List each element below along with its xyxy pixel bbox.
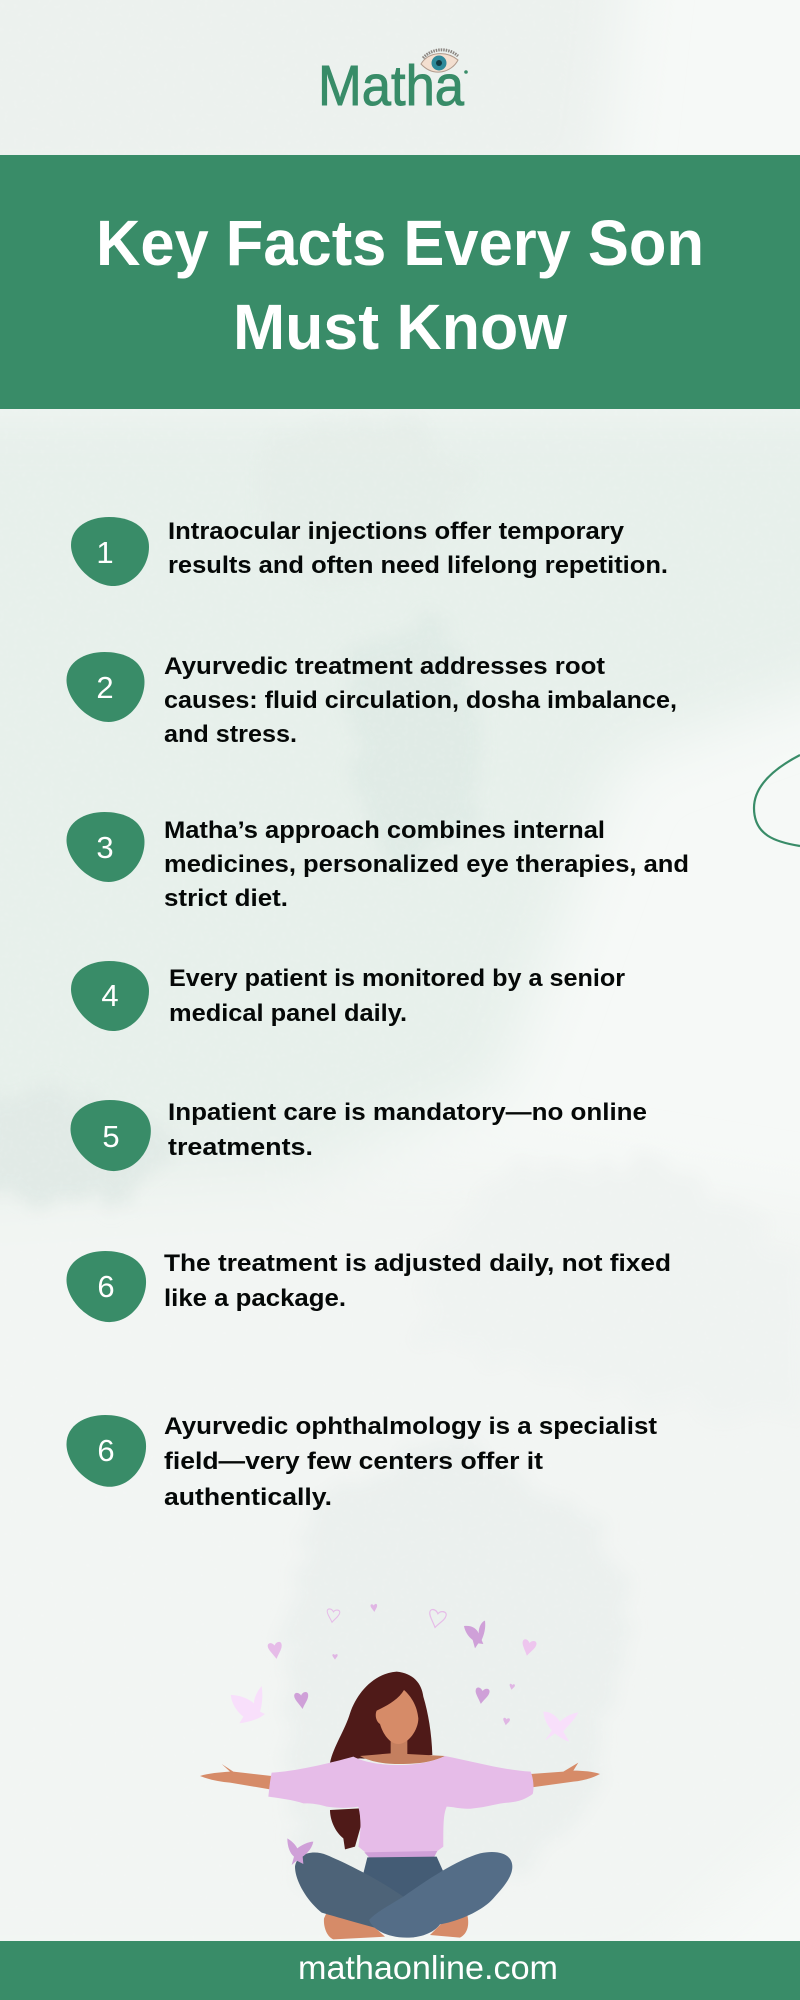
fact 1 (71, 517, 668, 586)
butterfly on knee (287, 1838, 313, 1865)
fact 1 text: results and often need lifelong repetition. (168, 552, 668, 579)
decorative outline curve (754, 755, 800, 846)
badge 2: 2 (96, 670, 114, 705)
footer band (0, 1941, 800, 2000)
fact 6 text (164, 1250, 671, 1312)
face (376, 1690, 418, 1744)
logo registered mark (464, 70, 468, 74)
fact 4 text (169, 965, 625, 1027)
fact 3 (66, 812, 689, 912)
fact 5 text (168, 1099, 647, 1161)
badge 5: 5 (102, 1119, 120, 1154)
badge 1 (71, 517, 149, 586)
fact 5 (70, 1099, 647, 1171)
fact 3 text: medicines, personalized eye therapies, and (164, 851, 689, 878)
badge 7 (66, 1415, 146, 1487)
badge 4: 4 (101, 978, 119, 1013)
arms (200, 1763, 600, 1789)
fact 4 text: Every patient is monitored by a senior (169, 965, 625, 992)
fact 4 (71, 961, 625, 1031)
fact 2 text (164, 653, 677, 748)
badge 4 (71, 961, 149, 1031)
sweater (268, 1756, 533, 1853)
badge 3 (66, 812, 144, 882)
trousers (295, 1852, 512, 1938)
fact 4 text: medical panel daily. (169, 1000, 407, 1027)
fact 7 (66, 1413, 657, 1511)
fact 3 text (164, 817, 689, 912)
fact 2 text: causes: fluid circulation, dosha imbalance, (164, 687, 677, 714)
badge 3: 3 (96, 830, 114, 865)
badge 2 (66, 652, 144, 722)
fact 1 text: Intraocular injections offer temporary (168, 518, 624, 545)
fact 1 text (168, 518, 668, 579)
hair (330, 1672, 432, 1849)
fact 7 text (164, 1413, 657, 1511)
fact 7 text: field—very few centers offer it (164, 1448, 543, 1475)
fact 6 text: The treatment is adjusted daily, not fixed (164, 1250, 671, 1277)
feet (324, 1914, 468, 1939)
fact 7 text: Ayurvedic ophthalmology is a specialist (164, 1413, 657, 1440)
title (96, 207, 704, 363)
title: Key Facts Every Son (96, 207, 704, 279)
fact 2 text: Ayurvedic treatment addresses root (164, 653, 605, 680)
neck and chest (360, 1737, 445, 1764)
butterflies (231, 1621, 578, 1742)
fact 3 text: strict diet. (164, 885, 288, 912)
logo eye icon (421, 50, 458, 72)
fact 3 text: Matha’s approach combines internal (164, 817, 605, 844)
badge 6: 6 (97, 1269, 115, 1304)
logo wordmark: Matha (318, 54, 464, 118)
waistband (364, 1851, 437, 1858)
fact 6 text: like a package. (164, 1285, 346, 1312)
fact 2 (66, 652, 677, 748)
badge 1: 1 (96, 535, 114, 570)
title: Must Know (233, 291, 567, 363)
fact 7 text: authentically. (164, 1484, 332, 1511)
fact 6 (66, 1250, 671, 1322)
fact 2 text: and stress. (164, 721, 297, 748)
badge 5 (70, 1100, 151, 1171)
hearts (267, 1604, 537, 1726)
footer website: mathaonline.com (298, 1949, 558, 1986)
fact 5 text: Inpatient care is mandatory—no online (168, 1099, 647, 1126)
logo (318, 50, 468, 118)
badge 7: 6 (97, 1433, 115, 1468)
title banner (0, 155, 800, 409)
illustration: meditating woman with hearts and butterflies (200, 1604, 600, 1939)
fact 5 text: treatments. (168, 1134, 313, 1161)
badge 6 (66, 1251, 146, 1322)
